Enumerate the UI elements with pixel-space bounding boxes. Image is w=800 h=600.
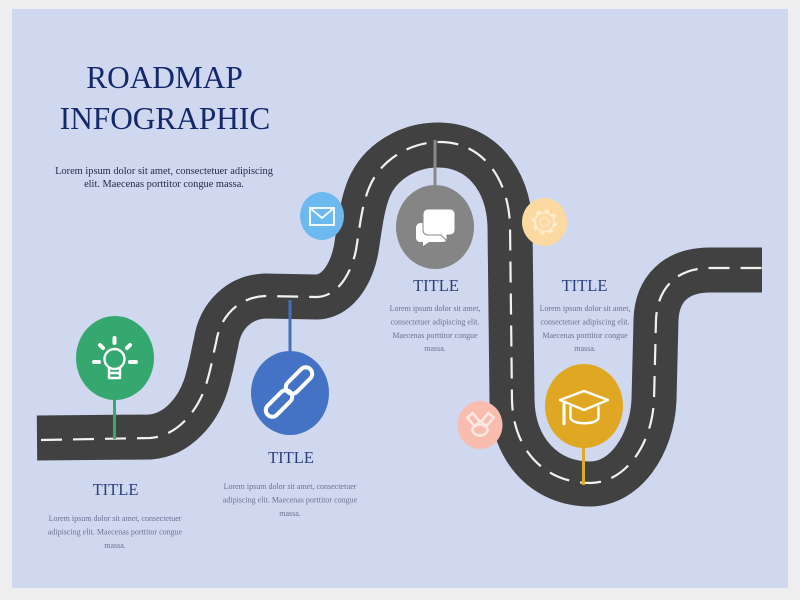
milestone 2: blue chain — [251, 300, 329, 435]
heading: ROADMAP — [86, 60, 243, 95]
icon: chat bubbles — [416, 209, 455, 246]
milestone 1 text: adipiscing elit. Maecenas porttitor congue — [48, 528, 183, 536]
icon badge: handshake — [458, 401, 502, 449]
milestone 4 text: Maecenas porttitor congue — [542, 331, 628, 340]
milestone 2 text: adipiscing elit. Maecenas porttitor congue — [223, 496, 358, 504]
milestone 2 text: massa. — [279, 509, 301, 518]
icon: chain link — [263, 365, 315, 419]
milestone 3 text — [390, 276, 480, 353]
icon badge: gear — [522, 198, 567, 246]
milestone 4 text — [540, 276, 630, 353]
milestone 4 text: Lorem ipsum dolor sit amet, — [540, 304, 630, 313]
intro text — [55, 166, 273, 190]
milestone 1 text: massa. — [104, 541, 126, 550]
icon: graduation cap — [560, 391, 608, 424]
milestone 4 text: consectetuer adipiscing elit. — [540, 318, 630, 326]
milestone 4 text: massa. — [574, 344, 596, 353]
milestone 4 text: TITLE — [562, 276, 607, 295]
intro text: Lorem ipsum dolor sit amet, consectetuer adipiscing — [55, 166, 273, 177]
intro text: elit. Maecenas porttitor congue massa. — [84, 179, 244, 190]
milestone 3 text: TITLE — [413, 276, 459, 295]
milestone 1: green lightbulb — [76, 316, 154, 439]
milestone 1 text: Lorem ipsum dolor sit amet, consectetuer — [49, 514, 182, 523]
icon badge: mail — [300, 192, 344, 240]
milestone 1 text: TITLE — [93, 480, 138, 499]
milestone 3 text: Maecenas porttitor congue — [392, 331, 478, 340]
milestone 1 text — [48, 480, 183, 550]
icon: lightbulb — [94, 338, 136, 378]
milestone 3: gray chat — [396, 140, 474, 269]
milestone 3 text: consectetuer adipiscing elit. — [390, 318, 480, 326]
milestone 3 text: massa. — [424, 344, 446, 353]
milestone 3 text: Lorem ipsum dolor sit amet, — [390, 304, 480, 313]
heading: INFOGRAPHIC — [60, 101, 270, 136]
milestone 2 text — [223, 448, 358, 518]
milestone 2 text: TITLE — [268, 448, 314, 467]
milestone 2 text: Lorem ipsum dolor sit amet, consectetuer — [224, 482, 357, 491]
milestone 4: gold graduation cap — [545, 364, 623, 485]
road — [37, 142, 762, 484]
heading — [60, 60, 270, 136]
